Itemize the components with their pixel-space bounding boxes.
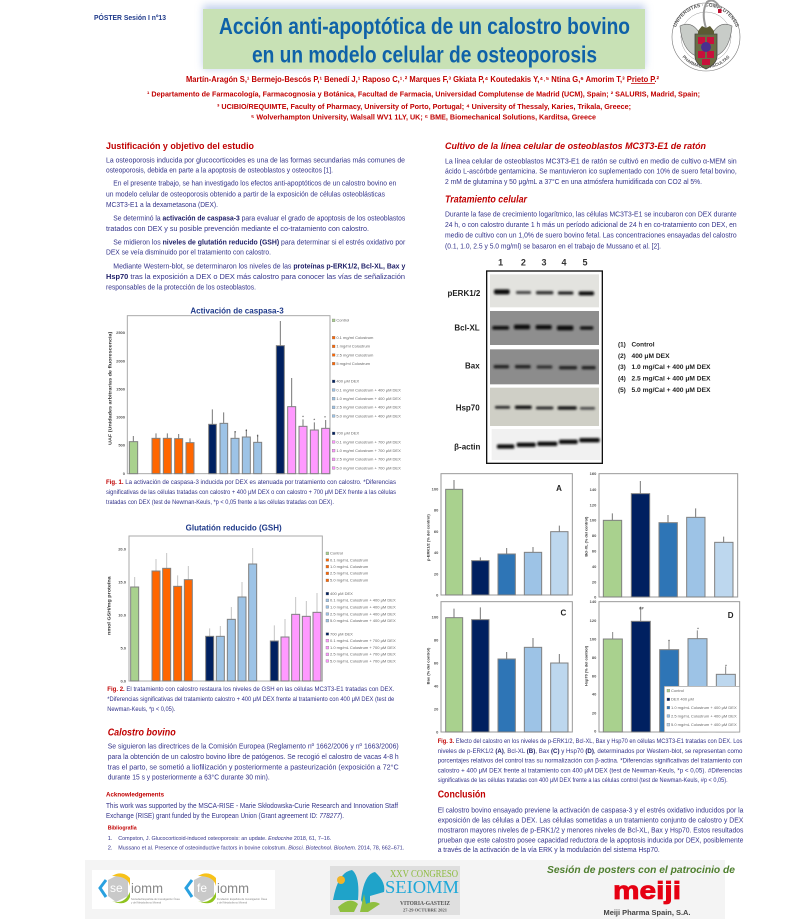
western blot panel: Bcl-XL [454,323,480,332]
bar chart D: Hsp70: 1.0 mg/mL Colostrum + 400 μM DEX [671,705,737,710]
bar chart A: p-ERK1/2: p-ERK1/2 (% del control) [425,514,430,561]
western blot legend: (4) [618,376,626,382]
bar chart C: Bax: Bax (% del control) [425,647,430,684]
icon: university crest [672,0,740,72]
bar chart A: p-ERK1/2 [425,474,572,597]
bar chart: caspase-3: * [324,415,326,420]
bar chart: caspase-3: 0.1 mg/ml Colostrum [336,335,374,340]
western blot legend: (1) [618,342,626,348]
text block: tratamiento: Durante la fase de crecimiento logarítmico, las células MC3T3-E1 se incubaron con DEX durante [445,211,737,218]
caption: figure 3: Fig. 3. Efecto del calostro en los niveles de p-ERK1/2, Bcl-XL, Bax y Hsp70 en células MC3T3-E1 tratadas con DEX. Los [438,738,742,745]
references: Compston, J. Glucocorticoid-induced osteoporosis: an update. Endocrine 2018, 61, 7–16. [118,836,332,842]
title banner [203,5,645,69]
bar chart: caspase-3: UAF (Unidades arbitrarias de fluorescencia) [107,331,113,445]
bar chart: glutathione: 5.0 mg/mL Colostrum + 700 μM DEX [330,658,396,663]
logos: seiomm and feiomm: iomm [217,880,249,896]
logos: seiomm and feiomm: Fundación Española de Investigación Ósea [217,896,268,901]
bar chart: caspase-3: Activación de caspasa-3 [190,306,284,316]
logos: seiomm and feiomm: se [110,881,123,895]
footer band [85,860,725,919]
text block: conclusión [438,807,744,854]
western blot panel: 3 [541,258,546,268]
western blot panel: 4 [561,258,566,268]
affiliations: ³ UCIBIO/REQUIMTE, Faculty of Pharmacy, University of Porto, Portugal; ⁴ University of Thessaly, Karies, Trikala, Greece; [217,102,631,111]
title banner: Acción anti-apoptótica de un calostro bovino [219,13,630,39]
bar chart D: Hsp70: 140 [590,599,597,604]
bar chart: glutathione: Glutatión reducido (GSH) [186,523,282,533]
authors: Martín-Aragón S,¹ Bermejo-Bescós P,¹ Benedí J,¹ Raposo C,¹˒² Marques F,³ Gkiata P,⁴ Koutedakis Y,⁴˒⁵ Ntina G,⁶ Amorim T,³ Prieto P.² [186,75,659,84]
bar chart C: Bax [425,602,572,734]
text block: conclusión: mostraron mayores niveles de p-ERK1/2 y menores niveles de Bcl-XL, Bax y Hsp70. Estos resultados [438,827,744,834]
text block: justificación: un modelo celular de osteoporosis obtenido a partir de la exposición de células osteoblásticas [106,191,385,198]
bar chart B: Bcl-XL: 140 [590,487,597,492]
bar chart: glutathione: 2.5 mg/mL Colostrum [330,571,369,576]
western blot legend: (3) [618,364,626,371]
bar chart D: Hsp70: D [728,611,734,620]
bar chart: caspase-3: 2.5 mg/ml Colostrum + 700 μM DEX [336,457,401,462]
caption: figure 3: calostro + 400 μM DEX frente al tratamiento con 400 μM DEX (test de Newman-Keuls, *p < 0,05). #Diferencias [438,768,742,774]
western blot legend: 400 μM DEX [632,353,670,360]
logos: seiomm and feiomm: fe [197,881,207,895]
bar chart: glutathione: 5.0 mg/mL Colostrum + 400 μM DEX [330,618,396,623]
bar chart B: Bcl-XL: Bcl-XL (% del control) [583,516,588,557]
western blot legend: (5) [618,387,626,394]
text block: justificación: Mediante Western-blot, se determinaron los niveles de las proteínas p-ERK1/2, Bcl-XL, Bax y [113,263,405,270]
bar chart C: Bax: 80 [434,638,439,643]
text block: justificación: responsables de la protección de los osteoblastos. [106,284,256,291]
caption: figure 2: Fig. 2. El tratamiento con calostro restaura los niveles de GSH en las células MC3T3-E1 tratadas con DEX. [107,686,395,693]
bar chart: glutathione: 2.5 mg/mL Colostrum + 700 μM DEX [330,652,396,657]
bar chart: glutathione: 5.0 [120,646,127,651]
text block: tratamiento: 24 h, o con calostro durante 1 h más un período adicional de 24 h en co-tratamiento con DEX, en [445,222,737,229]
bar chart: caspase-3: * [245,429,247,434]
bar chart B: Bcl-XL: 40 [592,564,597,569]
bar chart C: Bax: 60 [434,661,439,666]
bar chart: glutathione: 700 μM DEX [330,631,353,636]
bar chart D: Hsp70: 20 [592,710,597,715]
bar chart: glutathione: 0.1 mg/mL Colostrum + 700 μM DEX [330,638,396,643]
bar chart: caspase-3: * [302,415,304,420]
caption: figure 1 [106,479,396,506]
bar chart C: Bax: C [560,608,566,617]
bar chart B: Bcl-XL: 80 [592,533,597,538]
western blot legend: Control [632,342,655,348]
heading: acknowledgements: Acknowledgements [106,791,164,798]
bar chart D: Hsp70: 120 [590,618,597,623]
bar chart B: Bcl-XL: 0 [594,594,597,599]
bar chart: glutathione: 0.0 [120,678,127,683]
logo: congress seiomm [330,866,460,915]
bar chart B: Bcl-XL: 160 [590,471,597,476]
bar chart: caspase-3: 1.0 mg/ml Colostrum + 400 μM DEX [336,396,401,401]
western blot legend [618,342,711,394]
bar chart A: p-ERK1/2: A [556,484,562,493]
bar chart: caspase-3: 0.1 mg/ml Colostrum + 400 μM DEX [336,387,401,392]
text block: calostro bovino [108,743,399,782]
bar chart D: Hsp70: 0 [594,729,597,734]
bar chart: caspase-3 [107,306,401,476]
bar chart: glutathione: 400 μM DEX [330,591,353,596]
logo: congress seiomm: VITORIA-GASTEIZ [400,901,450,907]
icon: university crest: UNIVERSITAS · COMPLUTENSIS [672,3,739,27]
bar chart B: Bcl-XL: 20 [592,579,597,584]
text block: cultivo: ácido L-ascórbde gentamicina. Se mantuvieron ico suplementado con 10% de suero fetal bovino, [445,169,737,176]
caption: figure 3 [438,738,743,784]
text block: acknowledgements: Exchange (RISE) grant funded by the European Union (Grant agreement ID: 778277). [106,813,344,820]
bar chart C: Bax: 40 [434,684,439,689]
bar chart: caspase-3: * [234,430,236,435]
sponsor: meiji [547,865,735,917]
bar chart D: Hsp70: * [668,639,670,644]
text block: justificación: Hsp70 tras la exposición a DEX o DEX más calostro para conocer las vías de señalización [106,274,405,281]
affiliations: ¹ Departamento de Farmacología, Farmacognosia y Botánica, Facultad de Farmacia, Universidad Complutense de Madrid (UCM), Spain; ² SALURIS, Madrid, Spain; [147,90,700,98]
text block: cultivo [445,158,737,186]
references: Mussano et al. Presence of osteoinductive factors in bovine colostrum. Biosci. Biotechnol. Biochem. 2014, 78, 662–671. [118,846,405,852]
caption: figure 1: Fig. 1. La activación de caspasa-3 inducida por DEX es atenuada por tratamiento con calostro. *Diferencias [106,479,396,486]
western blot panel [447,258,602,463]
heading: calostro bovino: Calostro bovino [108,728,176,738]
western blot panel: 5 [582,258,587,268]
bar chart: glutathione: Control [330,551,343,556]
bar chart C: Bax: 0 [436,729,439,734]
bar chart: caspase-3: * [257,434,259,439]
bar chart: caspase-3: 1500 [116,387,126,392]
bar chart D: Hsp70: 5.0 mg/mL Colostrum + 400 μM DEX [671,722,737,727]
logos: seiomm and feiomm: iomm [131,880,163,896]
text block: calostro bovino: tras el parto, se sometió a liofilización y posteriormente a pasteurización (exposición a 72°C [108,764,399,772]
title banner: en un modelo celular de osteoporosis [252,42,597,68]
western blot panel: β-actin [454,443,480,452]
caption: figure 2: Newman-Keuls, *p < 0,05). [107,706,176,713]
text block: acknowledgements: This work was supported by the MSCA-RISE - Marie Skłodowska-Curie Research and Innovation Staff [106,803,398,810]
western blot panel: 1 [498,258,503,268]
affiliations: ⁵ Wolverhampton University, Walsall WV1 1LY, UK; ⁶ BME, Biomechanical Solutions, Karditsa, Greece [251,112,596,122]
logo: congress seiomm: SEIOMM [385,877,459,897]
bar chart A: p-ERK1/2: 40 [434,550,439,555]
bar chart: glutathione: nmol GSH/mg proteína [107,576,112,635]
bar chart A: p-ERK1/2: 80 [434,508,439,513]
bar chart: caspase-3: 2.5 mg/ml Colostrum [336,352,374,357]
bar chart B: Bcl-XL: 60 [592,549,597,554]
western blot panel: pERK1/2 [447,289,481,298]
text block: justificación: En el presente trabajo, se han investigado los efectos anti-apoptóticos de un calostro bovino en [113,181,396,188]
text block: justificación: MC3T3-E1 a la dexametasona (DEX). [106,202,218,209]
references: 1. [108,836,113,842]
text block: justificación: La osteoporosis inducida por glucocorticoides es una de las formas secundarias más comunes de [106,157,405,164]
bar chart B: Bcl-XL: 100 [590,518,597,523]
bar chart D: Hsp70: Hsp70 (% del control) [583,645,588,686]
bar chart: caspase-3: 5.0 mg/ml Colostrum + 400 μM DEX [336,413,401,418]
caption: figure 2 [107,686,395,713]
logos: seiomm and feiomm: y del Metabolismo Mineral [131,900,162,904]
text block: acknowledgements [106,803,398,820]
bar chart: caspase-3: 5.0 mg/ml Colostrum + 700 μM DEX [336,465,401,470]
caption: figure 1: tratadas con DEX (test de Newman-Keuls, *p < 0,05 frente a las células tratadas con DEX). [106,499,334,506]
bar chart D: Hsp70: 100 [590,636,597,641]
bar chart: caspase-3: 1.0 mg/ml Colostrum + 700 μM DEX [336,448,401,453]
bar chart C: Bax: 100 [432,615,439,620]
bar chart: glutathione: 15.0 [118,580,127,585]
bar chart: caspase-3: 500 [118,443,126,448]
affiliations [147,90,700,122]
references [108,836,405,852]
bar chart: caspase-3: * [313,418,315,423]
bar chart: caspase-3: 400 μM DEX [336,379,359,384]
references: 2. [108,846,113,852]
bar chart A: p-ERK1/2: 20 [434,571,439,576]
logo: congress seiomm: XXV CONGRESO [390,869,458,880]
text block: cultivo: La línea celular de osteoblastos MC3T3-E1 de ratón se cultivó en medio de cultivo α-MEM sin [445,158,737,165]
bar chart D: Hsp70: 2.5 mg/mL Colostrum + 400 μM DEX [671,713,737,718]
logos: seiomm and feiomm: y del Metabolismo Mineral [217,900,248,904]
caption: figure 3: niveles de p-ERK1/2 (A), Bcl-XL (B), Bax (C) y Hsp70 (D), determinados por Western-blot, se representan como [438,748,743,755]
bar chart D: Hsp70 [583,599,740,734]
western blot legend: 1.0 mg/Cal + 400 μM DEX [632,364,711,371]
heading: conclusión: Conclusión [438,789,486,801]
heading: cultivo: Cultivo de la línea celular de osteoblastos MC3T3-E1 de ratón [445,141,706,151]
western blot panel: Hsp70 [456,403,480,412]
western blot legend: (2) [618,353,626,360]
caption: figure 3: porcentajes relativos del control tras su normalización con β-actina. *Diferencias significativas del tratamiento con [438,758,743,764]
text block: tratamiento: medio de cultivo con un 1,0% de suero bovino fetal. Las concentraciones ensayadas del calostro [445,233,737,240]
sponsor: meiji: meiji [613,877,681,905]
logos: seiomm and feiomm: Sociedad Española de Investigación Ósea [131,896,180,901]
text block: cultivo: 2 mM de glutamina y 50 μg/mL a 37°C en una atmósfera humidificada con CO2 al 5%. [445,178,702,186]
heading: bibliografía: Bibliografía [108,826,138,832]
sponsor: meiji: Sesión de posters con el patrocinio de [547,865,735,876]
text block: tratamiento: (0.1, 1.0, 2.5 y 5.0 mg/ml) se basaron en el trabajo de Mussano et al. [2]. [445,244,661,251]
bar chart: caspase-3: 0 [123,471,126,476]
bar chart A: p-ERK1/2: 60 [434,529,439,534]
text block: justificación [106,157,406,291]
bar chart D: Hsp70: Control [671,688,684,693]
text block: calostro bovino: Se siguieron las directrices de la Comisión Europea (Reglamento nº 1662/2006 y nº 1663/2006) [108,743,399,750]
text block: conclusión: a través de la activación de la vía ERK y la modulación del sistema Hsp70. [438,847,660,854]
western blot panel: 2 [521,258,526,268]
western blot panel: Bax [465,361,480,370]
bar chart: glutathione: 2.5 mg/mL Colostrum + 400 μM DEX [330,611,396,616]
text block: conclusión: El calostro bovino ensayado previene la activación de caspasa-3 y el estrés oxidativo inducidos por la [438,807,743,814]
bar chart D: Hsp70: 40 [592,692,597,697]
bar chart A: p-ERK1/2: 100 [432,487,439,492]
caption: figure 1: significativas de las células tratadas con calostro + 400 μM DEX o con calostro + 700 μM DEX frente a las células [106,489,396,496]
bar chart: caspase-3: 5 mg/ml Colostrum [336,361,371,366]
text block: justificación: Se midieron los niveles de glutatión reducido (GSH) para determinar si el estrés oxidativo por [113,239,406,246]
text block: conclusión: exposición de las células a DEX. Las células sometidas a un tratamiento conjunto de calostro y DEX [438,817,744,824]
bar chart: glutathione [107,523,396,683]
bar chart: glutathione: 1.0 mg/mL Colostrum [330,564,369,569]
bar chart: caspase-3: 2000 [116,358,126,363]
sponsor: meiji: Meiji Pharma Spain, S.A. [604,908,690,917]
bar chart D: Hsp70: * [725,663,727,668]
heading: justificación: Justificación y objetivo del estudio [106,141,254,151]
bar chart D: Hsp70: 60 [592,673,597,678]
bar chart: caspase-3: 2.5 mg/ml Colostrum + 400 μM DEX [336,405,401,410]
logos: seiomm and feiomm [92,870,275,909]
text block: calostro bovino: durante 15 s y posteriormente a 63°C durante 30 min). [108,774,270,782]
bar chart C: Bax: 20 [434,707,439,712]
bar chart B: Bcl-XL [583,471,738,599]
bar chart: glutathione: 0.1 mg/mL Colostrum [330,557,369,562]
text block: justificación: tratados con DEX y su posible prevención mediante el co-tratamiento con calostro. [106,226,369,233]
bar chart D: Hsp70: * [697,627,699,632]
bar chart: caspase-3: 2500 [116,330,126,335]
text block: justificación: osteoporosis, debida en parte a la apoptosis de osteoblastos y osteocitos [1]. [106,168,333,175]
bar chart: caspase-3: 0.1 mg/ml Colostrum + 700 μM DEX [336,439,401,444]
bar chart B: Bcl-XL: 120 [590,502,597,507]
bar chart: glutathione: 20.0 [118,547,127,552]
poster session label: PÓSTER Sesión I nº13 [94,13,166,22]
bar chart D: Hsp70: 80 [592,655,597,660]
bar chart: caspase-3: Control [336,318,349,323]
bar chart: glutathione: 0.1 mg/mL Colostrum + 400 μM DEX [330,598,396,603]
bar chart: glutathione: 1.0 mg/mL Colostrum + 400 μM DEX [330,604,396,609]
caption: figure 2: *Diferencias significativas del tratamiento calostro + 400 μM DEX frente al tratamiento con 400 μM DEX (test de [107,696,395,703]
bar chart D: Hsp70: DEX 400 μM [671,697,694,702]
western blot legend: 2.5 mg/Cal + 400 μM DEX [632,376,711,382]
icon: university crest: PHARMACIAE FACULTAS [682,55,730,68]
bar chart: glutathione: 1.0 mg/mL Colostrum + 700 μM DEX [330,645,396,650]
bar chart A: p-ERK1/2: 0 [436,592,439,597]
bar chart: glutathione: 10.0 [118,613,127,618]
text block: conclusión: prueban que este calostro posee capacidad reductora de la apoptosis inducida por DEX, posiblemente [438,837,743,844]
text block: calostro bovino: para la obtención de un calostro bovino libre de patógenos. Se recogió el calostro de vacas 4-8 h [108,754,399,761]
bar chart: caspase-3: 1000 [116,415,126,420]
western blot legend: 5.0 mg/Cal + 400 μM DEX [632,387,711,394]
bar chart: glutathione: 5.0 mg/mL Colostrum [330,578,369,583]
caption: figure 3: significativas de las células tratadas con 400 μM DEX frente a las células control (test de Newman-Keuls, #p < 0,05). [438,777,728,784]
bar chart D: Hsp70: ## [639,606,644,611]
presenting author underline [631,82,655,84]
text block: tratamiento [445,211,737,251]
text block: justificación: DEX se veía disminuido por el tratamiento con calostro. [106,250,271,257]
bar chart: caspase-3: 1 mg/ml Colostrum [336,344,371,349]
bar chart: caspase-3: 700 μM DEX [336,431,359,436]
heading: tratamiento celular: Tratamiento celular [445,194,528,205]
logo: congress seiomm: 27-29 OCTUBRE 2021 [403,908,447,912]
text block: justificación: Se determinó la activación de caspasa-3 para evaluar el grado de apoptosis de los osteoblastos [113,215,406,222]
